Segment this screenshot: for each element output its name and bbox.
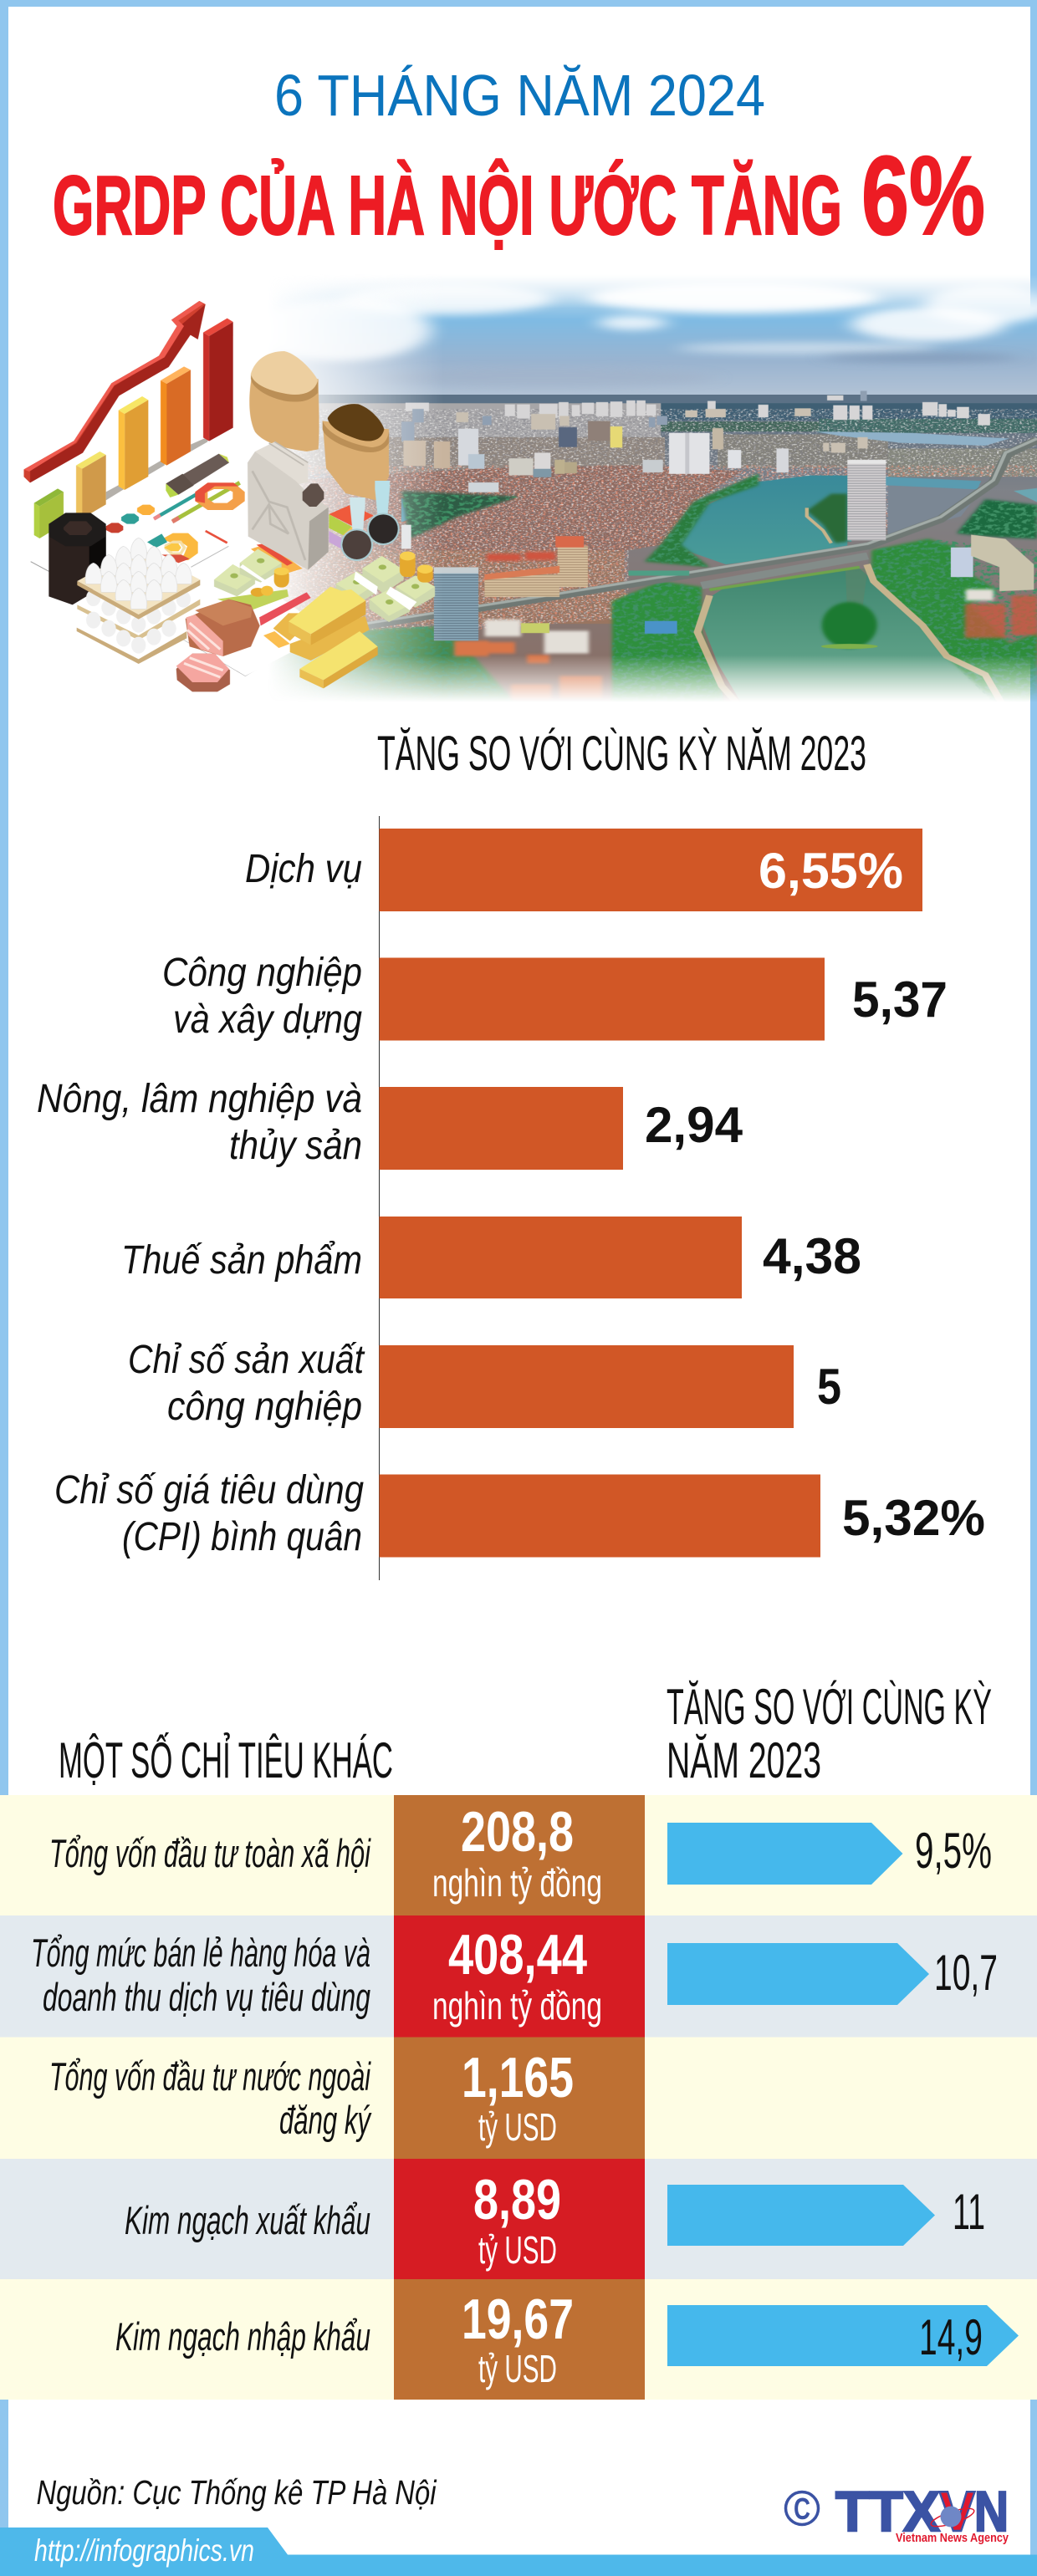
bar: Chỉ số sản xuất công nghiệp <box>128 1338 841 1429</box>
row: exports: 8,89 <box>473 2168 561 2232</box>
row: retail sales: nghìn tỷ đồng <box>432 1984 602 2028</box>
icon: coloured octagons <box>106 482 245 563</box>
logo: TTXVN: C <box>794 2492 810 2526</box>
bar: Thuế sản phẩm: 4,38 <box>763 1228 861 1284</box>
photo: aerial view of Hanoi with lakes <box>252 268 1037 711</box>
bar: Công nghiệp và xây dựng <box>162 951 948 1042</box>
title line: 6 tháng năm 2024: 6 THÁNG NĂM 2024 <box>274 63 765 128</box>
row: exports: Kim ngạch xuất khẩu <box>125 2198 370 2242</box>
icon: rising bar chart <box>34 319 233 538</box>
row: foreign investment <box>0 2037 1037 2159</box>
bar: Thuế sản phẩm: Thuế sản phẩm <box>121 1238 362 1283</box>
bar: Công nghiệp và xây dựng: 5,37 <box>852 972 948 1028</box>
row: imports: tỷ USD <box>478 2347 557 2390</box>
bar: Chỉ số sản xuất công nghiệp: công nghiệp <box>167 1385 362 1429</box>
bar: Chỉ số sản xuất công nghiệp: Chỉ số sản xuất <box>128 1338 365 1382</box>
indicators table <box>0 1795 1037 2400</box>
heading: growth column <box>667 1679 992 1788</box>
bar: Công nghiệp và xây dựng: Công nghiệp <box>162 951 362 995</box>
bar: Chỉ số sản xuất công nghiệp: 5 <box>817 1359 841 1415</box>
city speckle texture <box>259 409 1037 635</box>
icon: grey jerry can <box>248 441 329 570</box>
bar: Nông, lâm nghiệp và thủy sản: thủy sản <box>229 1124 362 1168</box>
row: foreign investment: đăng ký <box>279 2098 372 2142</box>
row: retail sales: 10,7 <box>934 1945 998 2001</box>
bar: Dịch vụ: 6,55% <box>759 843 903 899</box>
row: foreign investment: Tổng vốn đầu tư nước ngoài <box>49 2054 371 2099</box>
main title: GRDP của Hà Nội ước tăng 6%: 6% <box>861 134 985 258</box>
heading: growth column: NĂM 2023 <box>667 1732 821 1788</box>
icon: sack of coffee <box>323 404 389 500</box>
bridge and ring road <box>361 439 1037 626</box>
logo: TTXVN <box>786 2480 1009 2545</box>
bar: Nông, lâm nghiệp và thủy sản: 2,94 <box>645 1097 743 1153</box>
bar: Nông, lâm nghiệp và thủy sản <box>37 1077 743 1170</box>
logo: TTXVN: V <box>939 2480 975 2543</box>
illustration: isometric economic goods and growth chart <box>23 301 435 691</box>
row: total social investment <box>0 1795 1037 1915</box>
greenery <box>259 474 1037 711</box>
row: retail sales <box>0 1915 1037 2037</box>
bar: Chỉ số giá tiêu dùng (CPI) bình quân: (CPI) bình quân <box>122 1515 362 1559</box>
icon: marker pen and pencils <box>154 454 240 522</box>
row: foreign investment: 1,165 <box>462 2046 574 2109</box>
icon: rubber block <box>49 513 106 604</box>
bar: Công nghiệp và xây dựng: và xây dựng <box>173 997 362 1042</box>
row: imports: Kim ngạch nhập khẩu <box>115 2314 370 2359</box>
bar: Chỉ số giá tiêu dùng (CPI) bình quân <box>54 1468 985 1559</box>
colored paper strips <box>217 543 311 648</box>
row: foreign investment: tỷ USD <box>478 2105 557 2149</box>
bar: Nông, lâm nghiệp và thủy sản: Nông, lâm nghiệp và <box>37 1077 362 1121</box>
icon: small pie and flasks <box>329 481 400 561</box>
row: retail sales: Tổng mức bán lẻ hàng hóa và <box>31 1931 370 1975</box>
far high-rises <box>406 395 990 426</box>
row: exports: tỷ USD <box>478 2228 557 2272</box>
footer bar with website <box>0 2528 1037 2576</box>
icon: stacks of cash and coins <box>214 549 435 622</box>
row: retail sales: 408,44 <box>448 1923 587 1987</box>
bar: Chỉ số giá tiêu dùng (CPI) bình quân: Chỉ số giá tiêu dùng <box>54 1468 364 1512</box>
landmark towers <box>847 462 886 540</box>
row: imports <box>0 2279 1037 2400</box>
horizontal bar chart <box>37 816 985 1580</box>
bar: Thuế sản phẩm <box>121 1217 861 1298</box>
icon: large sack of flour <box>249 351 319 451</box>
source note: Nguồn: Cục Thống kê TP Hà Nội <box>37 2473 437 2512</box>
heading: other indicators: MỘT SỐ CHỈ TIÊU KHÁC <box>59 1732 393 1788</box>
row: retail sales: doanh thu dịch vụ tiêu dùng <box>43 1975 370 2019</box>
row: total social investment: 9,5% <box>915 1823 992 1879</box>
icon: gold bars <box>273 587 378 688</box>
row: imports: 19,67 <box>462 2288 574 2351</box>
row: total social investment: nghìn tỷ đồng <box>432 1861 602 1905</box>
row: imports: 14,9 <box>919 2309 983 2365</box>
footer bar with website: http://infographics.vn <box>34 2533 254 2568</box>
row: total social investment: 208,8 <box>461 1800 574 1864</box>
row: exports: 11 <box>953 2184 985 2240</box>
bar: Dịch vụ <box>245 829 922 911</box>
mid high-rises <box>401 421 789 548</box>
logo: TTXVN: Vietnam News Agency <box>896 2531 1009 2545</box>
row: exports <box>0 2159 1037 2279</box>
icon: red growth arrow <box>23 301 206 482</box>
bar: Dịch vụ: Dịch vụ <box>245 847 362 891</box>
bar: Chỉ số giá tiêu dùng (CPI) bình quân: 5,32% <box>842 1490 985 1546</box>
roof clusters <box>454 552 1037 700</box>
row: total social investment: Tổng vốn đầu tư toàn xã hội <box>49 1831 371 1875</box>
paper sheets <box>31 462 329 676</box>
icon: egg trays <box>77 538 200 664</box>
logo: TTXVN: TTX <box>835 2480 940 2543</box>
logo: TTXVN: N <box>974 2480 1009 2543</box>
icon: pork meat <box>176 599 260 691</box>
